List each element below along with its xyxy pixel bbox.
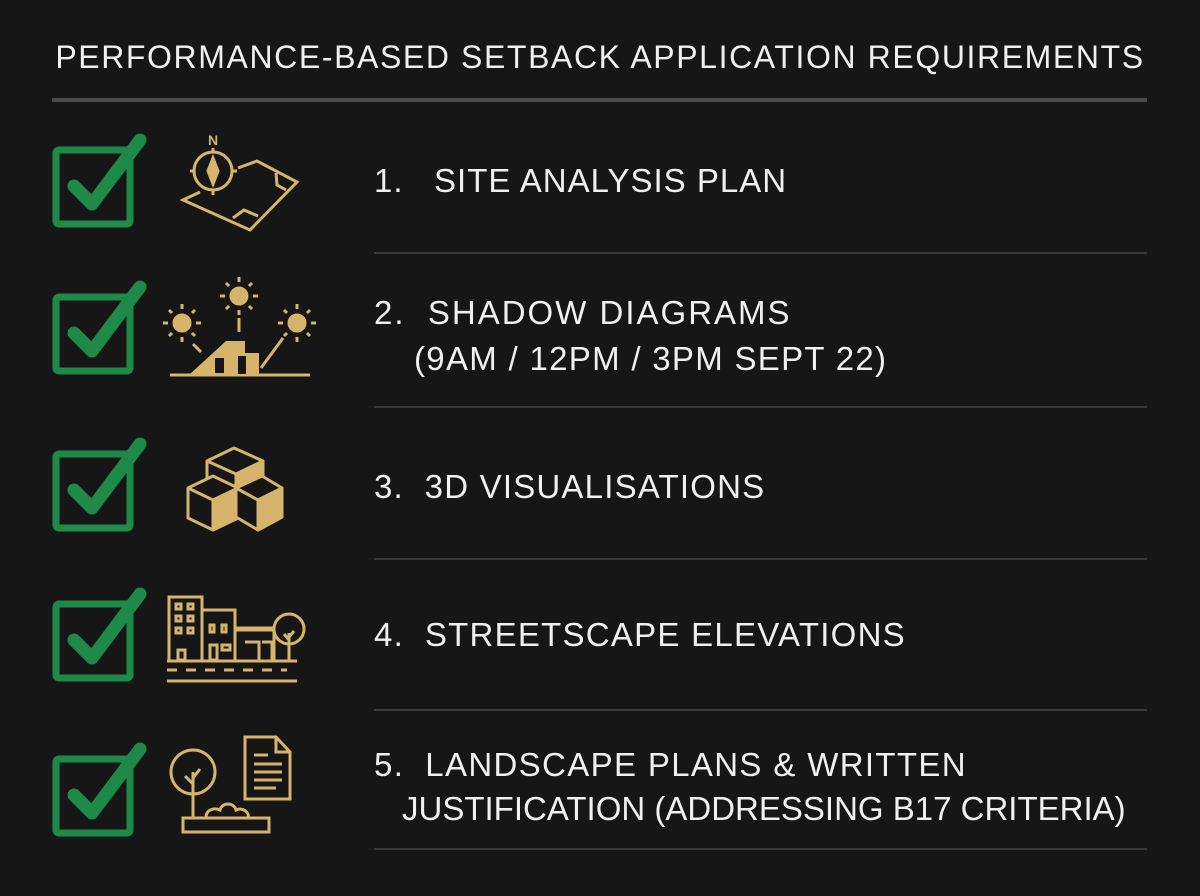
icon: landscape and document	[171, 737, 290, 832]
checkbox 5	[56, 749, 140, 833]
icon: shadow diagrams sun	[163, 277, 316, 375]
checkbox 1	[56, 140, 140, 224]
text: landscape: JUSTIFICATION (ADDRESSING B17 CRITERIA)	[402, 790, 1126, 827]
checkbox 3	[56, 444, 140, 528]
checkbox 2	[56, 287, 140, 371]
text: 3d: 3. 3D VISUALISATIONS	[374, 468, 765, 505]
checkbox 4	[56, 594, 140, 678]
text: shadow diagrams	[374, 294, 887, 377]
text: streetscape: 4. STREETSCAPE ELEVATIONS	[374, 616, 906, 653]
text: shadow diagrams: 2. SHADOW DIAGRAMS	[374, 294, 792, 331]
icon: site plan compass	[183, 132, 297, 230]
text: landscape	[374, 746, 1126, 827]
icon: streetscape	[167, 597, 304, 681]
text: site analysis: 1. SITE ANALYSIS PLAN	[374, 162, 787, 199]
text: landscape: 5. LANDSCAPE PLANS & WRITTEN	[374, 746, 967, 783]
title: PERFORMANCE-BASED SETBACK APPLICATION REQUIREMENTS	[55, 39, 1145, 75]
text: shadow diagrams: (9AM / 12PM / 3PM SEPT 22)	[414, 340, 887, 377]
icon: 3d cubes	[188, 448, 282, 530]
icon: site plan compass: N	[208, 132, 218, 148]
